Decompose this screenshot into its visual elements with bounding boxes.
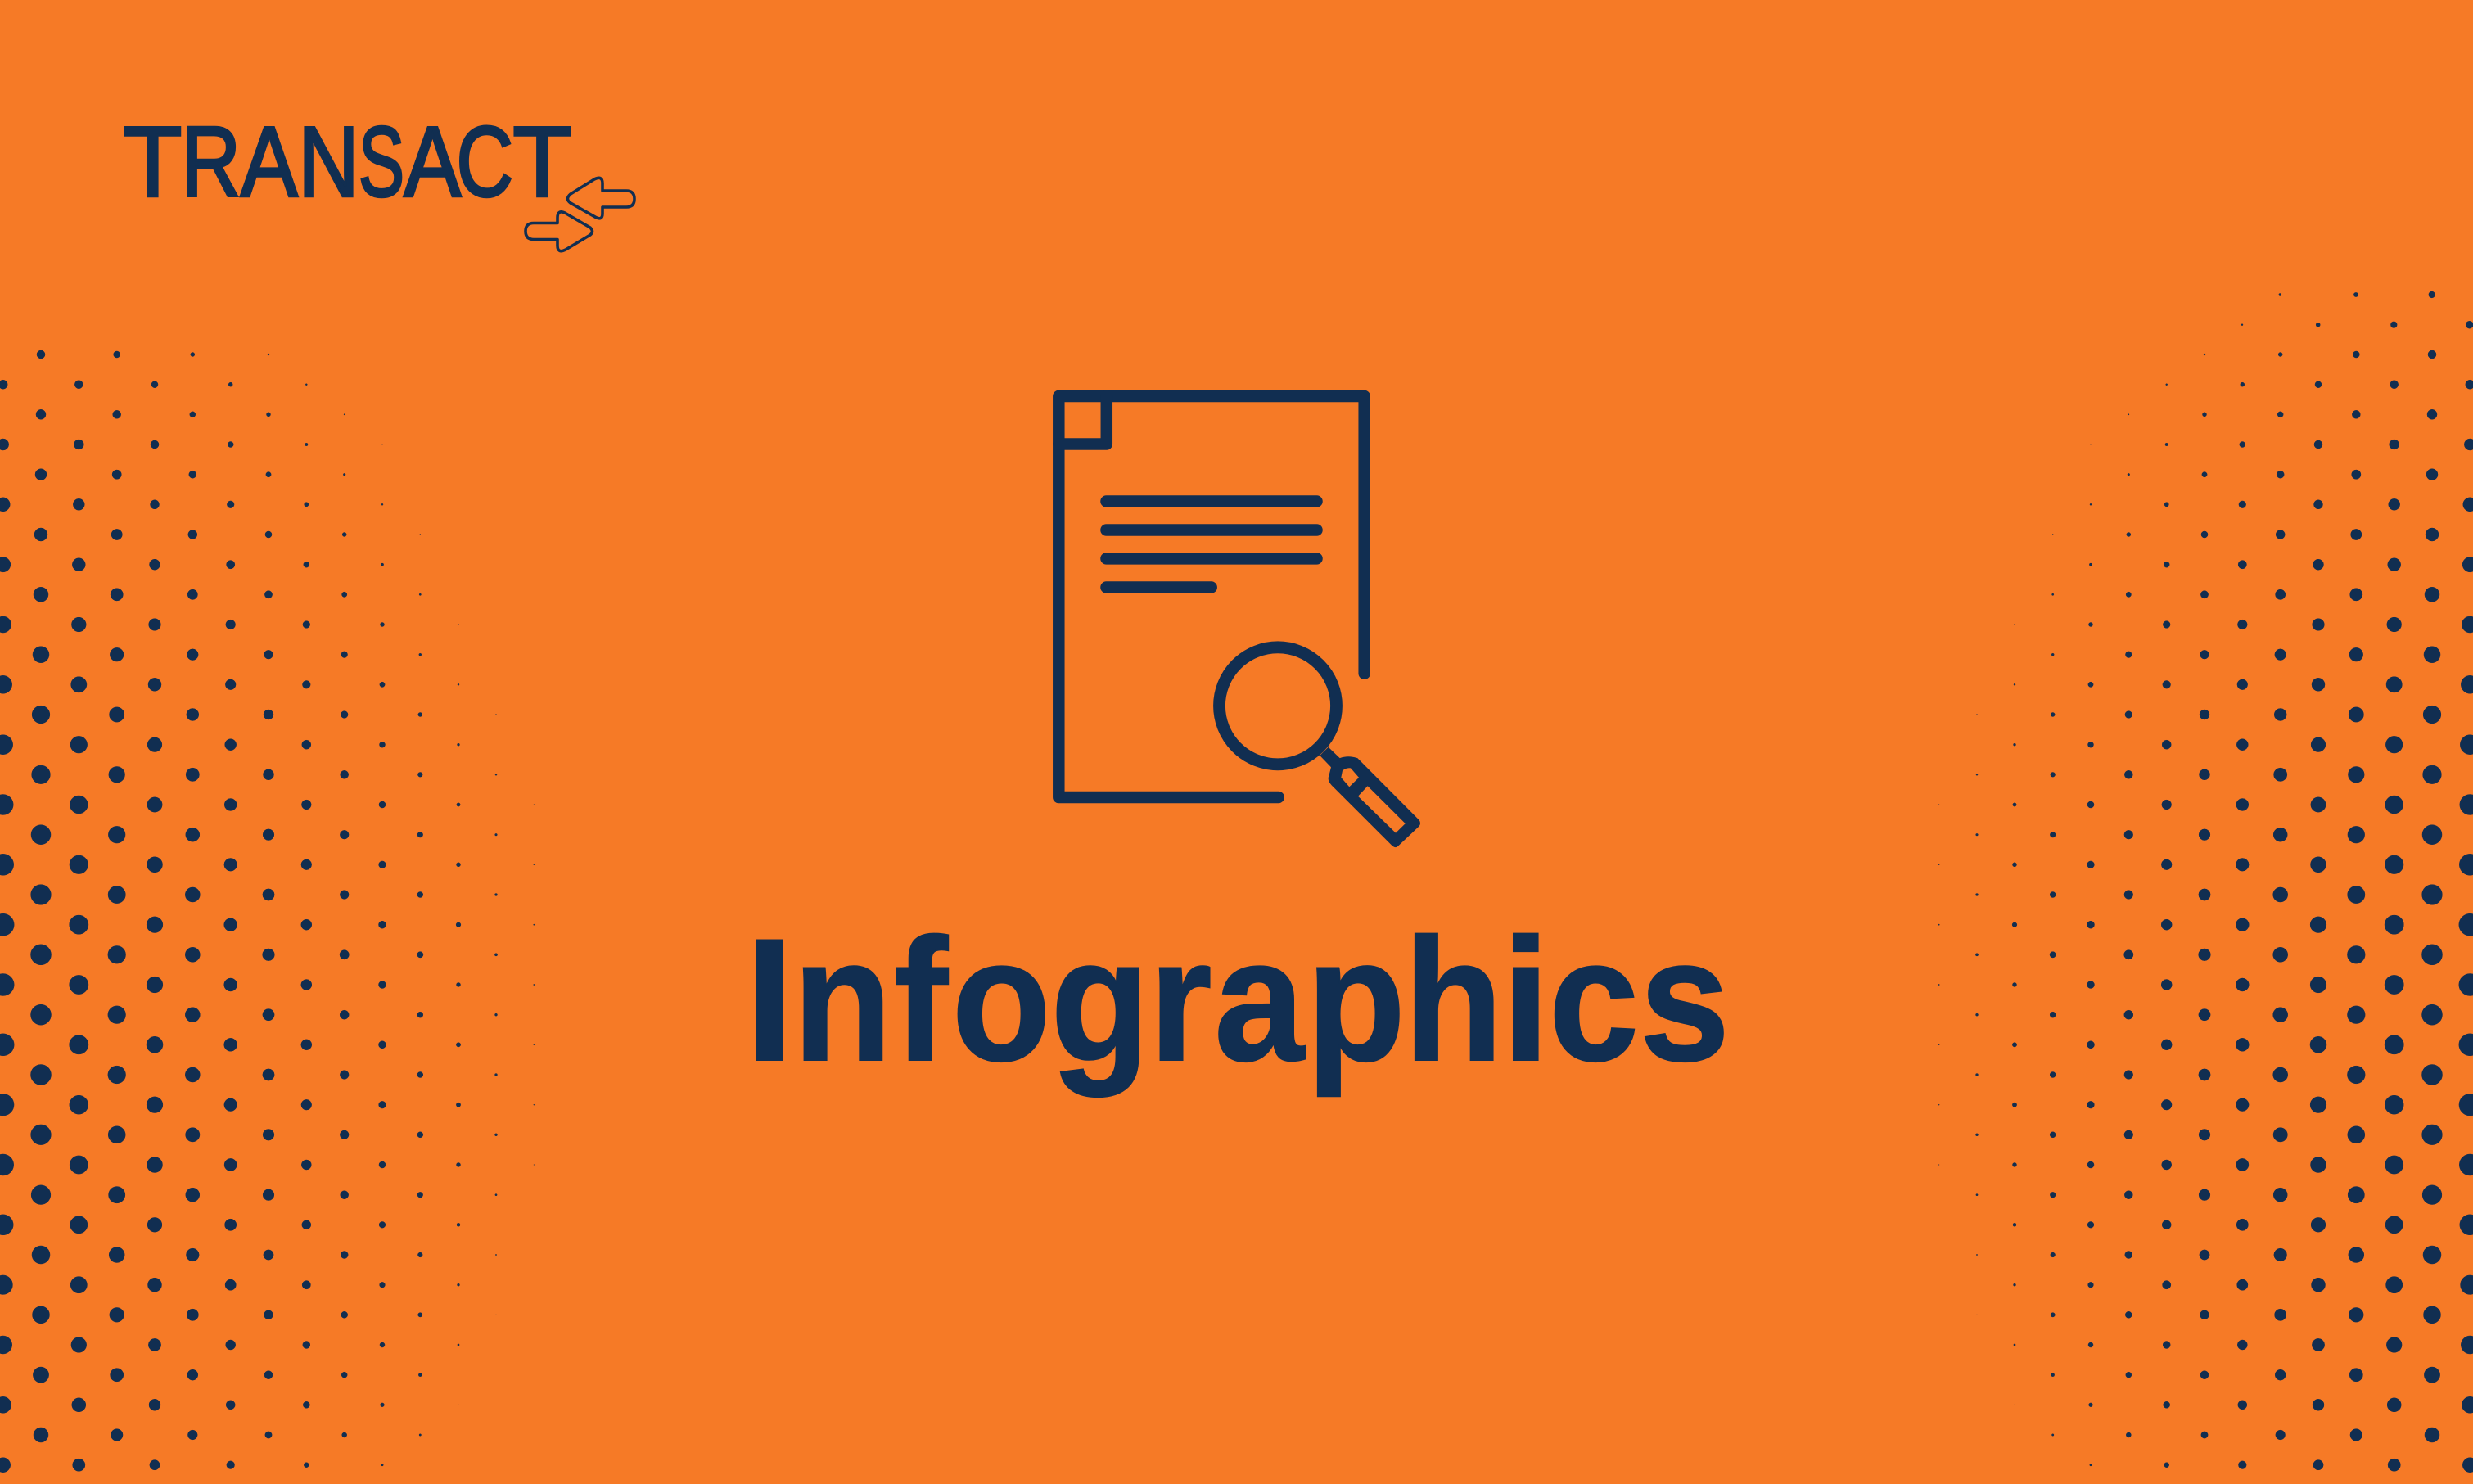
title: n (793, 903, 892, 1098)
logo wordmark: T (124, 106, 182, 218)
logo wordmark: A (241, 106, 298, 218)
title: f (894, 903, 949, 1098)
halftone dots: right (1938, 291, 2473, 1473)
title: h (1404, 903, 1503, 1098)
title: a (1214, 903, 1306, 1098)
document outline (1058, 396, 1365, 797)
logo wordmark: R (182, 106, 241, 218)
logo wordmark: C (457, 106, 513, 218)
logo wordmark: T (512, 106, 571, 218)
icon: document with magnifying glass (1058, 396, 1420, 847)
logo wordmark: S (359, 106, 404, 218)
halftone dots: left (0, 350, 535, 1473)
magnifying glass (1220, 647, 1420, 847)
logo wordmark: N (298, 106, 359, 218)
title: c (1549, 903, 1639, 1098)
logo: Transact (124, 106, 634, 251)
logo wordmark: A (404, 106, 462, 218)
title: r (1149, 903, 1212, 1098)
title: o (952, 903, 1051, 1098)
title: s (1640, 903, 1730, 1098)
title: i (1501, 903, 1550, 1098)
title: g (1050, 903, 1149, 1098)
title: p (1306, 903, 1406, 1098)
icon: exchange arrows (526, 178, 634, 251)
title: I (745, 903, 794, 1098)
